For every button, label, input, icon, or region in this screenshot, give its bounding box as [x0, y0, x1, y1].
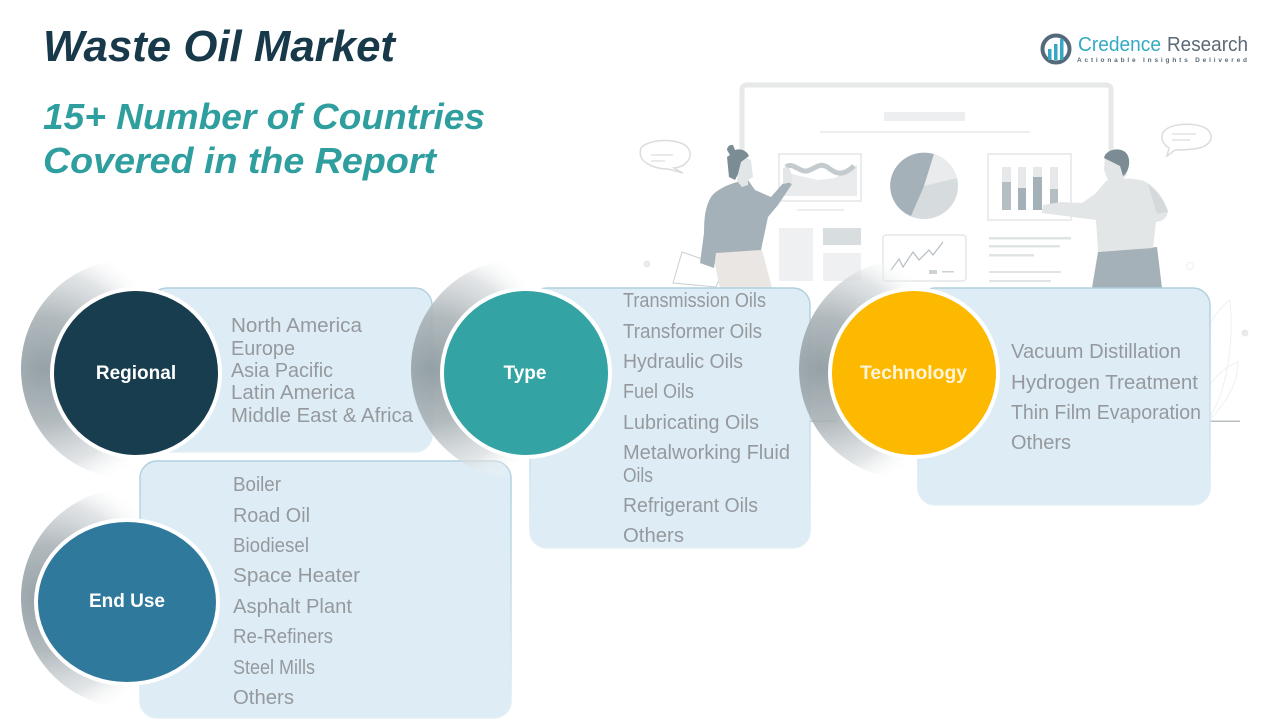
end use items: Road Oil [233, 505, 310, 527]
illustration: two presenters at a dashboard board [640, 85, 1248, 422]
technology circle: Technology [860, 363, 967, 384]
panel: technology [799, 259, 1210, 505]
type items: Lubricating Oils [623, 412, 759, 434]
logo: Credence Research: Actionable Insights Delivered [1077, 57, 1247, 64]
type list panel [530, 288, 810, 548]
layout blocks [779, 228, 861, 281]
pie chart [890, 153, 958, 219]
regional items: Latin America [231, 382, 356, 404]
type items: Metalworking Fluid [623, 442, 790, 464]
end use items: Biodiesel [233, 535, 309, 557]
regional list panel [150, 288, 432, 452]
end use items: Others [233, 687, 294, 709]
logo: Credence Research [1042, 33, 1248, 64]
type items: Transmission Oils [623, 290, 766, 312]
panel: type [411, 259, 810, 548]
speech bubbles [640, 124, 1211, 173]
end use items: Steel Mills [233, 657, 315, 679]
icon: logo magnifier with bars [1042, 36, 1070, 62]
board frame [742, 85, 1111, 300]
technology items: Thin Film Evaporation [1011, 402, 1201, 424]
type items: Oils [623, 465, 653, 487]
woman presenter [673, 145, 792, 288]
bar chart [988, 154, 1071, 220]
regional items: North America [231, 315, 363, 337]
subtitle: 15+ Number of Countries [43, 96, 485, 137]
end use items: Space Heater [233, 565, 360, 587]
regional crescent [21, 259, 241, 479]
logo: Credence Research: Research [1167, 33, 1248, 56]
line chart [883, 235, 966, 281]
panel: end use [21, 461, 511, 718]
type items: Others [623, 525, 684, 547]
end use circle: End Use [89, 591, 165, 612]
end use list panel [140, 461, 511, 718]
subtitle: Covered in the Report [43, 140, 438, 181]
text lines [989, 237, 1071, 282]
decorative dots and plant [644, 260, 1248, 422]
type items [623, 290, 790, 547]
technology items [1011, 341, 1201, 454]
board heading [820, 112, 1030, 133]
logo: Credence Research: Credence [1078, 33, 1161, 56]
type circle [442, 289, 610, 457]
type items: Refrigerant Oils [623, 495, 758, 517]
regional items: Asia Pacific [231, 360, 333, 382]
panel: regional [21, 259, 432, 479]
subtitle [43, 96, 485, 181]
type items: Fuel Oils [623, 381, 694, 403]
regional circle [52, 289, 220, 457]
end use circle [36, 520, 218, 684]
technology circle [830, 289, 998, 457]
regional circle: Regional [96, 363, 176, 384]
technology list panel [918, 288, 1210, 505]
technology items: Hydrogen Treatment [1011, 372, 1198, 394]
technology items: Vacuum Distillation [1011, 341, 1181, 363]
end use crescent [21, 488, 241, 708]
type items: Transformer Oils [623, 321, 762, 343]
regional items: Middle East & Africa [231, 405, 414, 427]
technology crescent [799, 259, 1019, 479]
area chart [779, 154, 861, 211]
title: Waste Oil Market [43, 22, 397, 71]
type items: Hydraulic Oils [623, 351, 743, 373]
man presenter [1042, 149, 1168, 288]
end use items: Boiler [233, 474, 281, 496]
type crescent [411, 259, 631, 479]
end use items: Re-Refiners [233, 626, 333, 648]
type circle: Type [504, 363, 546, 384]
technology items: Others [1011, 432, 1071, 454]
end use items [233, 474, 360, 709]
end use items: Asphalt Plant [233, 596, 352, 618]
regional items: Europe [231, 338, 295, 360]
regional items [231, 315, 414, 427]
